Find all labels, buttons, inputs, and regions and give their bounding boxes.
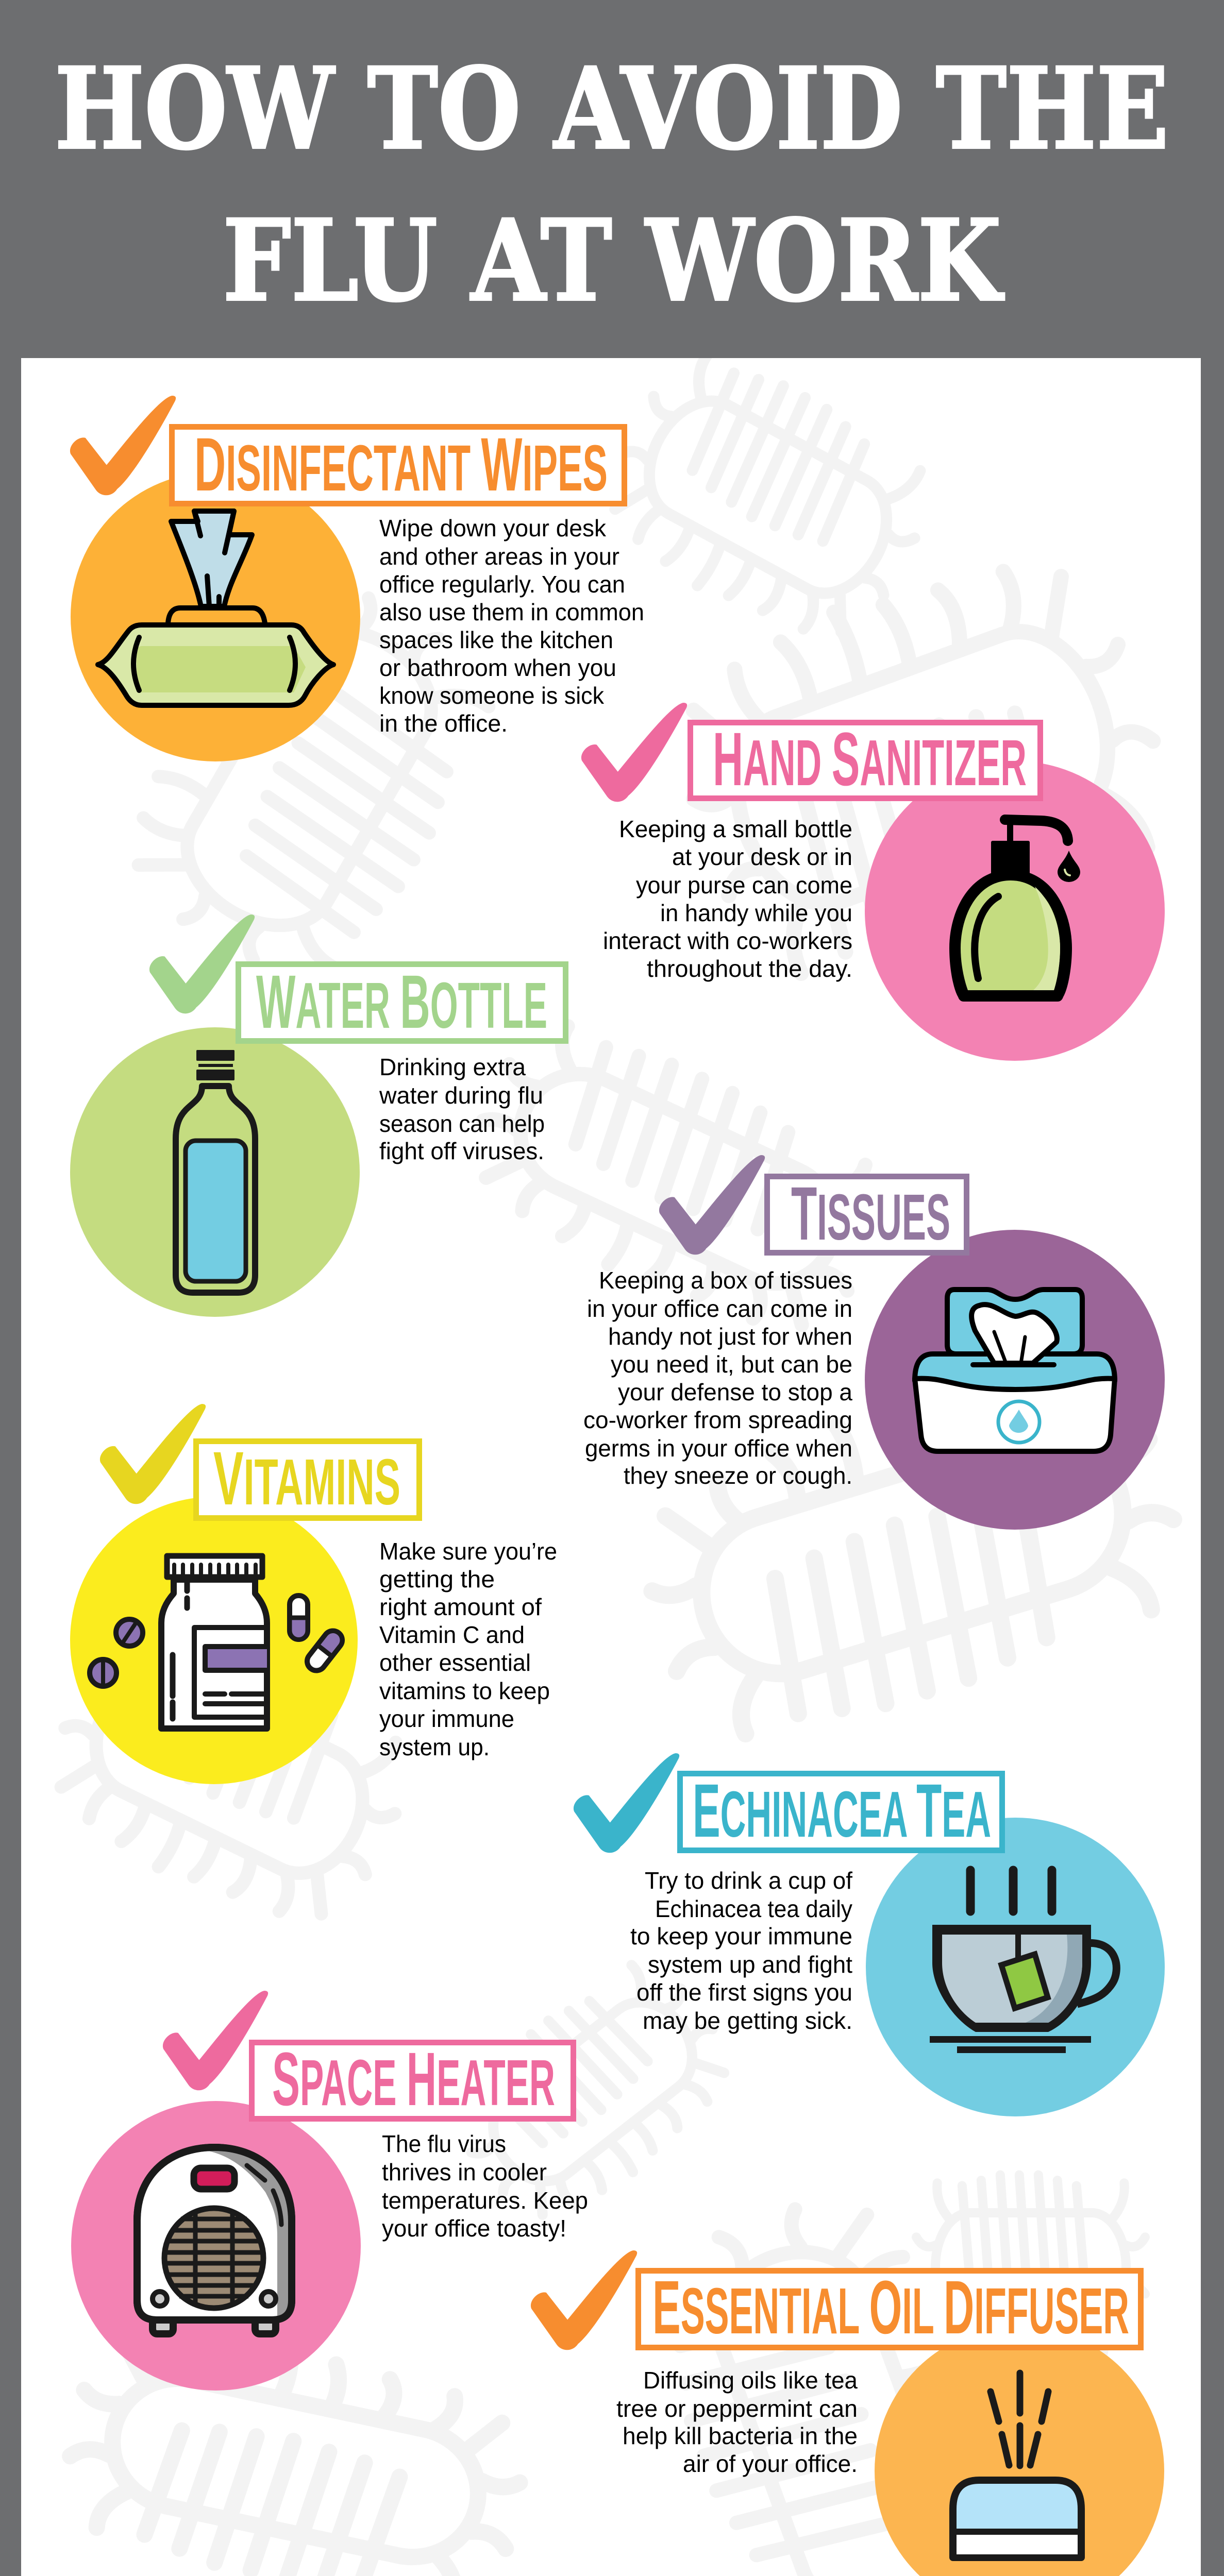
circle: water bottle	[70, 1027, 360, 1317]
text: wipes description: office regularly. You can	[379, 571, 625, 598]
circle: tissues	[865, 1230, 1165, 1530]
text: tissues description: in your office can come in	[587, 1295, 852, 1322]
title: FLU AT WORK	[223, 195, 1004, 327]
heading: hand sanitizer: HAND SANITIZER	[713, 717, 1027, 802]
panel: water bottle	[70, 914, 566, 1317]
icon: check mark	[70, 396, 176, 495]
text: tea description: off the first signs you	[636, 1979, 852, 2006]
panel: hand sanitizer	[581, 703, 1165, 1061]
text: wipes description: also use them in common	[379, 599, 644, 625]
panel: essential oil diffuser	[531, 2250, 1164, 2576]
text: tea description	[630, 1867, 852, 2034]
text: sanitizer description: interact with co-workers	[603, 927, 852, 954]
text: heater description: thrives in cooler	[382, 2159, 547, 2185]
circle: tea	[866, 1818, 1165, 2116]
text: sanitizer description: your purse can come	[636, 872, 852, 899]
text: vitamins description: system up.	[379, 1734, 490, 1760]
circle: heater	[71, 2101, 361, 2391]
icon: check mark	[581, 703, 687, 802]
title	[55, 43, 1169, 327]
panel: tissues	[583, 1155, 1165, 1530]
text: tissues description: co-worker from spreading	[583, 1406, 852, 1433]
text: tea description: system up and fight	[648, 1951, 852, 1978]
icon: check mark	[531, 2250, 637, 2350]
icon: check mark	[574, 1753, 679, 1853]
panel: space heater	[71, 1991, 588, 2391]
text: vitamins description	[379, 1538, 557, 1760]
text: diffuser description: tree or peppermint can	[616, 2395, 858, 2422]
text: vitamins description: right amount of	[379, 1594, 542, 1620]
text: wipes description: in the office.	[379, 710, 508, 737]
text: heater description	[382, 2130, 588, 2242]
text: wipes description: or bathroom when you	[379, 654, 616, 681]
text: sanitizer description: Keeping a small bottle	[619, 816, 852, 842]
circle: wipes	[71, 472, 360, 761]
icon: check mark	[659, 1155, 765, 1255]
heading: water bottle: WATER BOTTLE	[256, 960, 547, 1044]
icon: water bottle	[176, 1050, 255, 1293]
text: tea description: Try to drink a cup of	[645, 1867, 852, 1894]
text: tea description: may be getting sick.	[643, 2007, 852, 2034]
text: tissues description	[583, 1267, 852, 1489]
icon: sanitizer bottle	[949, 820, 1080, 1002]
text: water bottle description	[379, 1054, 545, 1164]
circle: diffuser	[875, 2326, 1164, 2576]
panel: echinacea tea	[574, 1753, 1165, 2116]
text: wipes description: know someone is sick	[379, 682, 605, 709]
text: vitamins description: Make sure you’re	[379, 1538, 557, 1565]
text: vitamins description: Vitamin C and	[379, 1621, 525, 1648]
text: tissues description: germs in your office when	[585, 1435, 852, 1462]
heading: echinacea tea: ECHINACEA TEA	[693, 1769, 991, 1853]
icon: check mark	[149, 914, 255, 1013]
text: tea description: Echinacea tea daily	[655, 1895, 852, 1922]
text: vitamins description: other essential	[379, 1649, 531, 1676]
text: water bottle description: season can help	[379, 1110, 545, 1137]
text: tissues description: Keeping a box of tissues	[599, 1267, 852, 1294]
heading: vitamins	[196, 1436, 420, 1521]
text: vitamins description: vitamins to keep	[379, 1677, 550, 1704]
text: heater description: temperatures. Keep	[382, 2187, 588, 2214]
heading: tissues: TISSUES	[791, 1172, 950, 1256]
text: vitamins description: your immune	[379, 1705, 514, 1732]
text: sanitizer description: at your desk or in	[672, 843, 852, 870]
icon: check mark	[163, 1991, 268, 2090]
text: diffuser description: help kill bacteria in the	[623, 2422, 858, 2449]
icon: check mark	[100, 1404, 206, 1504]
circle: vitamins	[70, 1497, 358, 1784]
text: sanitizer description: in handy while you	[660, 900, 852, 926]
heading: vitamins: VITAMINS	[213, 1436, 400, 1521]
text: tissues description: they sneeze or cough.	[624, 1462, 852, 1489]
heading: tissues	[767, 1172, 967, 1256]
text: wipes description: Wipe down your desk	[379, 515, 607, 541]
icon: tea cup	[930, 1870, 1116, 2053]
text: diffuser description	[616, 2367, 858, 2477]
icon: tissue box	[915, 1290, 1115, 1451]
icon: oil diffuser	[949, 2373, 1085, 2557]
text: sanitizer description	[603, 816, 852, 982]
heading: space heater: SPACE HEATER	[272, 2037, 555, 2122]
text: tissues description: you need it, but can be	[611, 1351, 852, 1378]
text: tissues description: handy not just for when	[608, 1323, 852, 1350]
panel: vitamins	[70, 1404, 557, 1784]
icon: vitamin bottle and pills	[90, 1556, 346, 1728]
icon: wipes package	[98, 511, 333, 705]
text: tissues description: your defense to stop a	[618, 1379, 852, 1405]
circle: sanitizer	[865, 761, 1165, 1061]
text: heater description: your office toasty!	[382, 2215, 566, 2242]
text: heater description: The flu virus	[382, 2130, 506, 2157]
text: vitamins description: getting the	[379, 1566, 495, 1592]
text: sanitizer description: throughout the day.	[647, 955, 852, 982]
heading: hand sanitizer	[691, 717, 1040, 802]
icon: space heater	[137, 2147, 292, 2334]
text: wipes description	[379, 515, 644, 737]
text: water bottle description: water during flu	[379, 1082, 543, 1109]
text: diffuser description: air of your office.	[683, 2450, 858, 2477]
text: diffuser description: Diffusing oils like tea	[643, 2367, 858, 2394]
text: wipes description: and other areas in your	[379, 543, 619, 570]
panel: disinfectant wipes	[70, 396, 644, 761]
heading: disinfectant wipes: DISINFECTANT WIPES	[194, 422, 608, 507]
text: tea description: to keep your immune	[630, 1923, 852, 1950]
text: water bottle description: Drinking extra	[379, 1054, 526, 1080]
text: wipes description: spaces like the kitchen	[379, 626, 613, 653]
text: water bottle description: fight off viruses.	[379, 1138, 544, 1164]
